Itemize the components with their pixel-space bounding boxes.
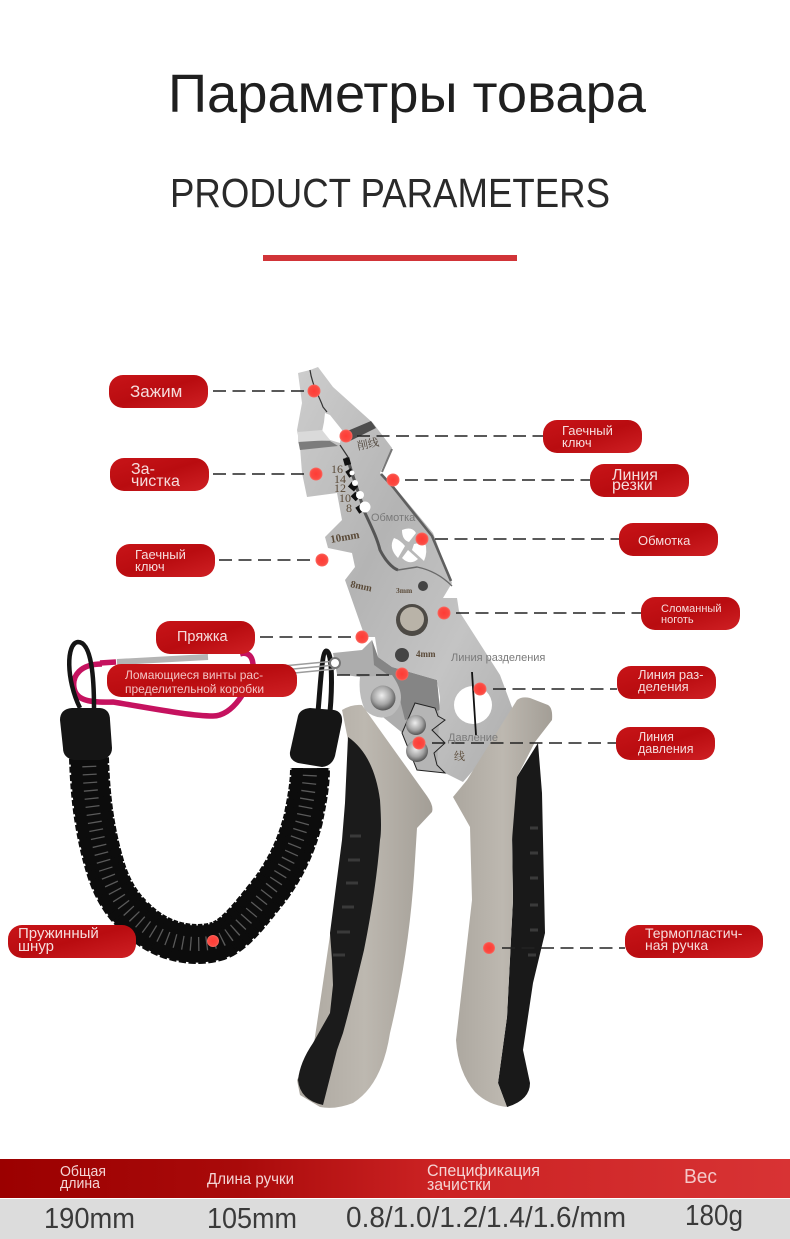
spring cord [89,758,310,944]
crimping plate [402,703,445,773]
label: thermoplastic handle: Термопластич- [645,925,743,941]
label: stripping [110,458,209,491]
value: handle length: 105mm [207,1203,297,1235]
specification table header [0,1159,790,1198]
jaw crack line [310,370,348,457]
large hole [454,686,492,724]
stripping scale: 12 [334,481,346,495]
right loop [318,651,331,712]
header: stripping spec: Спецификация [427,1161,540,1180]
label: cutting line: резки [612,477,653,494]
shaded jaw band [345,421,376,441]
label: spring cord: шнур [18,938,54,955]
grey annotation: dividing line: Линия разделения [451,652,545,664]
marker dots [207,384,495,954]
grey annotation: pressure: Давление [448,732,498,744]
stripping scale [331,457,398,570]
label: cutting line: Линия [612,467,658,484]
label: wrench left [116,544,215,577]
label: wrench right: Гаечный [562,423,613,438]
cross shaped hole [392,529,426,562]
label: cutting line [590,464,689,497]
label: pressure line [616,727,715,760]
grey annotation: wrapping: Обмотка [371,512,416,524]
label: breaking junction box screws: пределительной коробки [125,682,264,696]
label: wrapping: Обмотка [638,533,691,548]
small holes [418,581,428,591]
label: dividing line [617,666,716,699]
jaw gap [322,413,342,443]
label: spring cord: Пружинный [18,925,99,942]
right handle grey shell [453,697,552,1107]
notch shade and blade edge [381,474,451,581]
pliers [297,367,552,1108]
overlapping plate edge [398,567,452,586]
pliers head [297,367,513,782]
label: breaking junction box screws [107,664,297,697]
stripping scale: 14 [334,472,346,486]
lower lever [333,640,444,772]
lower pivot [360,675,401,718]
label: stripping: чистка [131,473,180,490]
label: pressure line: давления [638,742,694,756]
left handle black grip [298,737,381,1105]
lanyard: carabiner, loops and spring cord [60,642,342,944]
label: dividing line: деления [638,679,689,694]
pliers: 削线 [356,434,380,454]
label: broken nail: Сломанный [661,603,721,615]
label: buckle: Пряжка [177,629,229,645]
label: wrench left: ключ [135,559,165,574]
label: wrench left: Гаечный [135,547,186,562]
label: thermoplastic handle: ная ручка [645,937,708,953]
right cord cap [290,708,342,767]
engraved sizes: 10mm [329,529,360,546]
specification table header: длина [60,1175,101,1192]
left cord cap [60,708,112,760]
label: wrench right [543,420,642,453]
grip ribs [333,828,538,955]
specification table header: зачистки [427,1175,491,1194]
label: wrench right: ключ [562,435,592,450]
dark inner lever [372,640,440,720]
stripping scale: 16 [331,462,343,476]
header: weight: Вес [684,1166,717,1188]
stripping scale: 10 [339,491,351,505]
callout leader lines [213,391,641,948]
label: clamp [109,375,208,408]
left loop [69,642,94,708]
pivot rivet [396,604,428,636]
label: broken nail [641,597,740,630]
title: Параметры товара [168,64,647,124]
pliers: 3mm [396,586,413,595]
stripping scale: 8 [346,501,352,515]
label: buckle [156,621,255,654]
label: stripping: За- [131,461,155,478]
label: pressure line: Линия [638,730,674,744]
header: total length: Общая [60,1163,106,1180]
value: stripping spec: 0.8/1.0/1.2/1.4/1.6/mm [346,1202,626,1234]
label: breaking junction box screws: Ломающиеся винты рас- [125,668,263,682]
specification table values [0,1199,790,1239]
label: thermoplastic handle [625,925,763,958]
label: wrapping [619,523,718,556]
value: weight: 180g [685,1200,743,1232]
label: dividing line: Линия раз- [638,667,704,682]
label: clamp: Зажим [130,382,182,401]
subtitle: PRODUCT PARAMETERS [170,170,610,216]
left handle grey shell [297,705,432,1108]
pliers: 4mm [416,649,436,659]
red divider [263,255,517,261]
value: total length: 190mm [44,1203,135,1235]
key ring eye [330,658,340,668]
pliers: 线 [454,748,465,764]
right handle black grip [498,743,545,1107]
header: handle length: Длина ручки [207,1171,294,1188]
pliers: 8mm [349,579,374,595]
carabiner [74,653,253,716]
steel key ring [262,661,335,676]
label: spring cord [8,925,136,958]
label: broken nail: ноготь [661,614,694,626]
